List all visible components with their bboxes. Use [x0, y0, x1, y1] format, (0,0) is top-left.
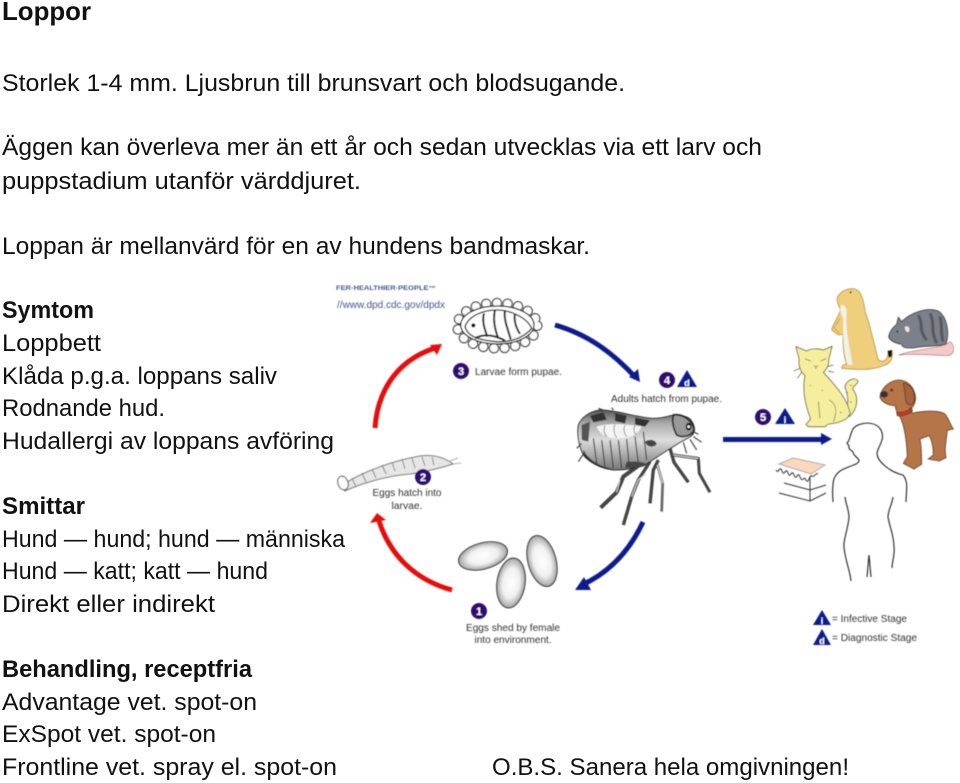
text block: eggs and development: puppstadium utanför värddjuret. — [2, 168, 361, 195]
step 5 label — [755, 408, 795, 425]
source credit — [336, 285, 445, 311]
step 5 label: i — [784, 415, 786, 425]
section: symptoms: Klåda p.g.a. loppans saliv — [2, 363, 277, 390]
legend: d — [819, 636, 825, 646]
section: treatment — [2, 656, 337, 781]
source credit: //www.dpd.cdc.gov/dpdx — [337, 300, 445, 311]
step 5 label: 5 — [760, 412, 766, 424]
legend: i — [821, 616, 823, 626]
section: transmission: Hund — hund; hund — människa — [2, 526, 346, 553]
icon: rat — [889, 310, 954, 356]
legend: = Infective Stage — [832, 614, 907, 625]
icon: pupa in cocoon — [457, 303, 537, 348]
arrow: adult to eggs — [575, 522, 643, 590]
step 3 label — [453, 363, 562, 379]
section: treatment: ExSpot vet. spot-on — [2, 721, 216, 748]
section: symptoms: Hudallergi av loppans avföring — [2, 428, 334, 455]
arrow: larva to pupa — [375, 344, 442, 428]
section: symptoms: Rodnande hud. — [2, 395, 165, 422]
icon: eggs — [455, 532, 562, 610]
section: transmission — [2, 493, 346, 618]
callout: clean the environment: O.B.S. Sanera hela omgivningen! — [492, 754, 849, 781]
icon: dog — [880, 380, 953, 469]
step 1 label — [466, 603, 560, 646]
section: transmission: Hund — katt; katt — hund — [2, 558, 268, 585]
legend: = Diagnostic Stage — [832, 633, 917, 644]
icon: adult flea — [577, 408, 710, 525]
step 4 label: d — [684, 378, 690, 388]
section: treatment: Advantage vet. spot-on — [2, 689, 257, 716]
text block: eggs and development — [2, 134, 762, 195]
icon: larva — [336, 455, 461, 491]
icon: skin cross-section — [776, 458, 826, 501]
step 2 label: 2 — [420, 472, 426, 484]
step 3 label: Larvae form pupae. — [475, 367, 562, 378]
step 1 label: 1 — [476, 606, 482, 618]
step 4 label — [611, 370, 722, 405]
text block: eggs and development: Äggen kan överleva mer än ett år och sedan utvecklas via ett larv och — [2, 134, 762, 161]
text block: intermediate host: Loppan är mellanvärd för en av hundens bandmaskar. — [2, 233, 590, 260]
step 2 label: Eggs hatch into — [372, 488, 442, 499]
step 4 label: Adults hatch from pupae. — [611, 394, 722, 405]
icon: prairie dog — [832, 289, 892, 369]
section: treatment: Behandling, receptfria — [2, 656, 253, 683]
icon: human outline — [833, 423, 907, 581]
life cycle diagram — [336, 285, 954, 646]
arrow: pupa to adult — [555, 325, 640, 382]
source credit: FER·HEALTHIER·PEOPLE™ — [336, 285, 436, 292]
text block: size and colour: Storlek 1-4 mm. Ljusbrun till brunsvart och blodsugande. — [2, 70, 625, 97]
section: symptoms: Loppbett — [2, 330, 101, 357]
icon: cat — [794, 346, 858, 427]
step 2 label: larvae. — [392, 501, 422, 512]
legend — [813, 610, 917, 646]
step 1 label: into environment. — [474, 635, 552, 646]
step 1 label: Eggs shed by female — [466, 623, 560, 634]
section: symptoms — [2, 297, 334, 455]
section: transmission: Smittar — [2, 493, 85, 520]
arrow: to host — [723, 433, 832, 445]
step 3 label: 3 — [458, 366, 464, 378]
step 4 label: 4 — [664, 375, 671, 387]
arrow: eggs to larva — [370, 513, 452, 590]
section: treatment: Frontline vet. spray el. spot-on — [2, 754, 337, 781]
section: symptoms: Symtom — [2, 297, 94, 324]
step 2 label — [372, 469, 442, 512]
section: transmission: Direkt eller indirekt — [2, 591, 215, 618]
